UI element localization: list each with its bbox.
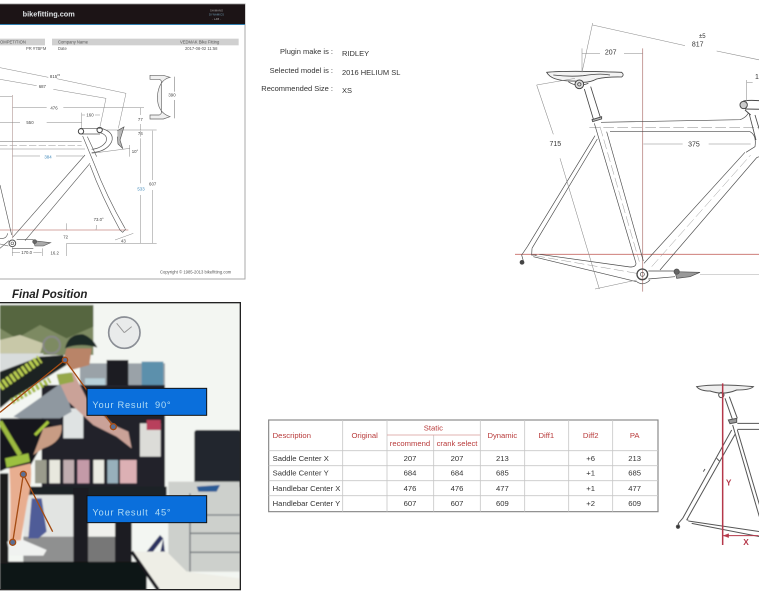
report info fields	[0, 39, 239, 51]
table rows: 207	[451, 454, 463, 463]
table rows: 609	[628, 499, 641, 508]
report header bar	[0, 4, 245, 25]
table rows: Handlebar Center Y	[273, 499, 340, 508]
plugin summary text: Selected model is :	[270, 66, 333, 75]
table header: Dynamic	[487, 431, 517, 440]
table rows: +2	[586, 499, 595, 508]
table rows: Saddle Center X	[273, 454, 329, 463]
report info fields: Company Name	[58, 40, 89, 45]
panel: bikefitting.com report	[0, 4, 245, 279]
dimension labels: 817	[692, 41, 704, 48]
table rows: +1	[586, 484, 595, 493]
panel: final position photo	[0, 302, 241, 592]
dimension labels: 476	[50, 105, 58, 110]
red reference lines	[515, 48, 759, 292]
report header bar: SHIMANO	[210, 9, 223, 12]
table rows: 607	[451, 499, 463, 508]
dimension labels: 550	[26, 120, 34, 125]
copyright line: Copyright © 1985-2013 bikefitting.com	[160, 270, 232, 275]
red X and Y measures	[723, 383, 759, 545]
callout: result 90 degrees	[87, 388, 207, 415]
table rows: 476	[404, 484, 416, 493]
table rows: 684	[451, 469, 464, 478]
table header: Description	[273, 431, 311, 440]
plugin summary text: Plugin make is :	[280, 47, 333, 56]
frame tubes	[0, 136, 126, 248]
table rows: +1	[586, 469, 595, 478]
dimension labels: 390	[168, 93, 176, 98]
plugin summary text: XS	[342, 86, 352, 95]
wall poster	[0, 305, 93, 373]
report info fields: PR #7BFM	[26, 46, 47, 51]
joint angle lines	[0, 357, 116, 545]
dimension labels: ±5	[699, 34, 706, 40]
dimension labels: 207	[605, 50, 617, 57]
table rows: 609	[496, 499, 509, 508]
monitor and filing cabinet	[140, 430, 241, 572]
table header: Diff2	[583, 431, 598, 440]
dimension labels: 533	[137, 187, 145, 192]
dimension labels: 160	[86, 113, 94, 118]
table grid	[269, 420, 658, 512]
plugin summary text: 2016 HELIUM SL	[342, 68, 400, 77]
plugin summary text: Recommended Size :	[261, 84, 333, 93]
heading: Final Position: Final Position	[12, 289, 87, 301]
dimension labels: 384	[44, 155, 52, 160]
table rows: 685	[628, 469, 641, 478]
dimension labels: 77	[138, 117, 143, 122]
table rows: 607	[404, 499, 416, 508]
dimension lines	[0, 68, 157, 256]
dimension labels	[21, 73, 176, 256]
dimension lines	[537, 23, 759, 289]
wall clock	[109, 317, 140, 348]
diagram: saddle center X and Y: X	[743, 537, 749, 547]
dimension labels: 715	[550, 141, 561, 148]
dimension labels: 10°	[132, 149, 139, 154]
table rows	[273, 454, 641, 508]
table rows: 207	[404, 454, 416, 463]
handlebar front view	[150, 75, 175, 119]
report header bar: DYNAMICS	[209, 13, 224, 16]
equipment rack	[20, 360, 167, 563]
dimension labels: 73.0°	[94, 217, 104, 222]
dimension labels: 74	[138, 131, 143, 136]
dimension labels: 72	[63, 234, 69, 239]
table rows: 684	[404, 469, 417, 478]
callout: result 90 degrees: Your Result 90°	[92, 400, 171, 410]
photo scene	[0, 302, 241, 592]
table header: PA	[630, 431, 640, 440]
table header	[273, 424, 640, 448]
frame geometry drawing	[0, 68, 175, 256]
dimension labels: 16.2	[50, 251, 59, 256]
report header bar: bikefitting.com	[23, 9, 75, 18]
rider	[0, 334, 132, 563]
table rows: 213	[496, 454, 509, 463]
table: saddle and handlebar fit results	[269, 420, 658, 512]
table rows: +6	[586, 454, 595, 463]
table header: Original	[351, 431, 378, 440]
frame diagram: size XS	[515, 23, 759, 292]
dimension labels: 687	[39, 84, 47, 89]
report info fields: Date	[58, 46, 67, 51]
table rows: 213	[628, 454, 641, 463]
table rows: 685	[496, 469, 509, 478]
diagram: saddle center X and Y	[676, 383, 759, 547]
frame outline	[676, 385, 759, 537]
table rows: 477	[628, 484, 641, 493]
table header: Diff1	[539, 431, 554, 440]
red reference lines	[0, 95, 128, 238]
report info fields: OMPETITION	[0, 40, 26, 45]
plugin summary text: RIDLEY	[342, 49, 369, 58]
table rows: Handlebar Center X	[273, 484, 340, 493]
callout: result 45 degrees: Your Result 45°	[92, 507, 171, 517]
dimension labels	[550, 34, 759, 148]
callout: result 45 degrees	[87, 496, 207, 523]
dimension labels: 170.0	[21, 250, 33, 255]
dimension labels: 815	[50, 74, 57, 79]
plugin summary text	[261, 47, 400, 95]
dimension labels: 607	[149, 182, 157, 187]
table rows: 476	[451, 484, 463, 493]
stem and handlebar	[78, 127, 124, 153]
dimension labels: 375	[688, 141, 700, 148]
table rows: 477	[496, 484, 509, 493]
frame tubes	[520, 100, 759, 284]
floor	[0, 552, 240, 592]
table header: recommend	[390, 439, 430, 448]
dimension labels: 1	[755, 74, 759, 81]
saddle and seatpost	[547, 71, 623, 122]
dimension labels: 43	[121, 238, 126, 243]
dimension labels: ±5	[57, 73, 61, 77]
table rows: Saddle Center Y	[273, 469, 329, 478]
diagram: saddle center X and Y: Y	[726, 477, 732, 487]
report header bar: - LAB -	[212, 18, 221, 21]
table header: Static	[424, 424, 443, 433]
report info fields: VEDMAK Bike Fitting	[180, 40, 220, 45]
table header: crank select	[437, 439, 478, 448]
report info fields: 2017-08-02 11:58	[185, 46, 218, 51]
